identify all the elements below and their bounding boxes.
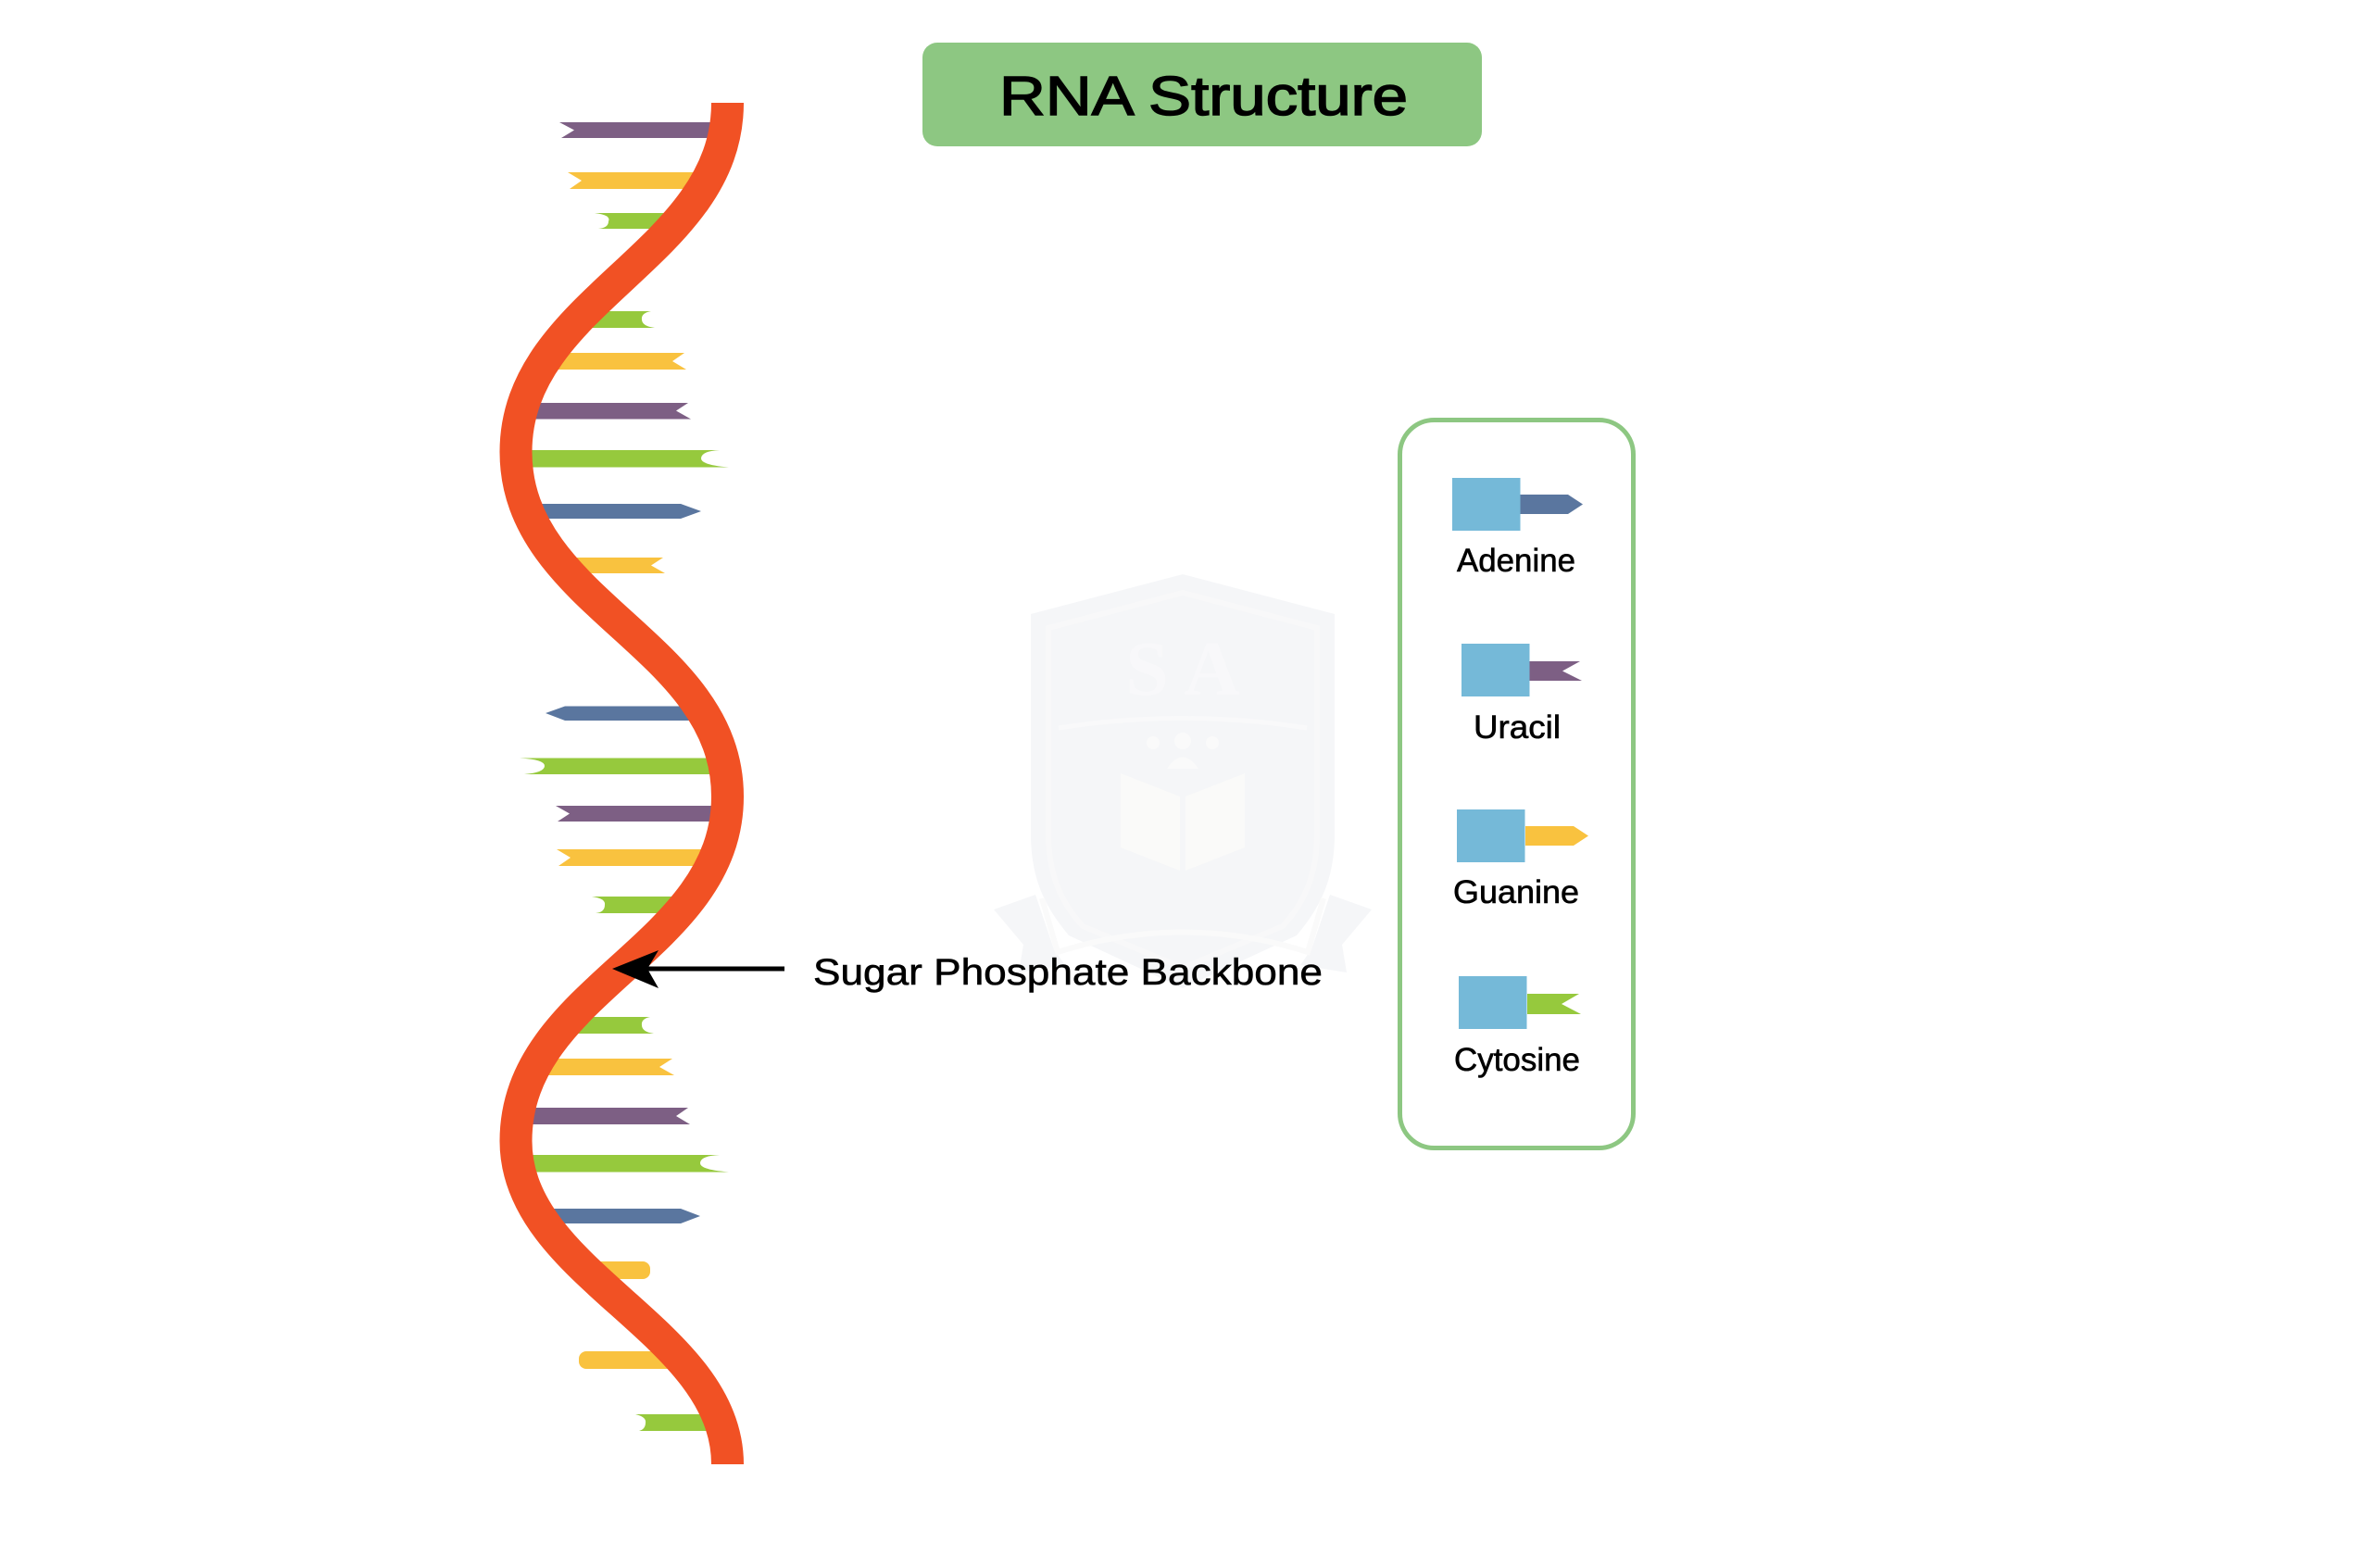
legend item: uracil: Uracil: [1474, 709, 1561, 746]
legend item: guanine: Guanine: [1453, 874, 1579, 910]
title banner: [922, 43, 1482, 146]
base: adenine blue: [546, 706, 713, 721]
base: guanine yellow: [557, 849, 722, 866]
legend border: [1400, 420, 1634, 1148]
legend item: adenine: [1452, 478, 1583, 579]
backbone label: Sugar Phosphate Backbone: [813, 952, 1323, 993]
legend panel: [1400, 420, 1634, 1148]
sugar phosphate backbone: [516, 103, 728, 1464]
base: cytosine green: [565, 1017, 654, 1034]
title banner: RNA Structure: [999, 66, 1408, 127]
legend item: guanine: [1453, 809, 1588, 910]
legend item: cytosine: Cytosine: [1454, 1042, 1580, 1078]
base: uracil purple: [523, 1108, 690, 1124]
RNA strand with bases: [516, 103, 732, 1464]
legend item: cytosine: [1454, 976, 1581, 1078]
base: adenine blue: [528, 504, 701, 519]
base: cytosine green: [574, 311, 655, 328]
base: cytosine green: [523, 1155, 729, 1173]
base: uracil purple: [559, 122, 732, 138]
base: guanine yellow: [556, 558, 665, 573]
base: uracil purple: [523, 403, 691, 419]
base: guanine yellow rounded: [579, 1351, 685, 1369]
base: cytosine green: [523, 450, 729, 467]
watermark: academy shield crest: S A: [1125, 626, 1240, 712]
base: uracil purple: [556, 806, 732, 822]
base: cytosine green: [635, 1414, 718, 1431]
legend item: adenine: Adenine: [1457, 543, 1575, 579]
base: guanine yellow: [537, 353, 686, 370]
arrow to backbone: [612, 950, 784, 988]
base: guanine yellow: [568, 172, 713, 189]
base: guanine yellow: [533, 1059, 674, 1075]
base: cytosine green: [592, 897, 685, 913]
base: cytosine green: [595, 213, 676, 229]
base: cytosine green: [520, 758, 722, 774]
watermark: academy shield crest: [994, 574, 1372, 988]
base: adenine blue: [533, 1209, 700, 1223]
legend item: uracil: [1461, 644, 1582, 746]
base: guanine yellow rounded: [583, 1261, 650, 1279]
